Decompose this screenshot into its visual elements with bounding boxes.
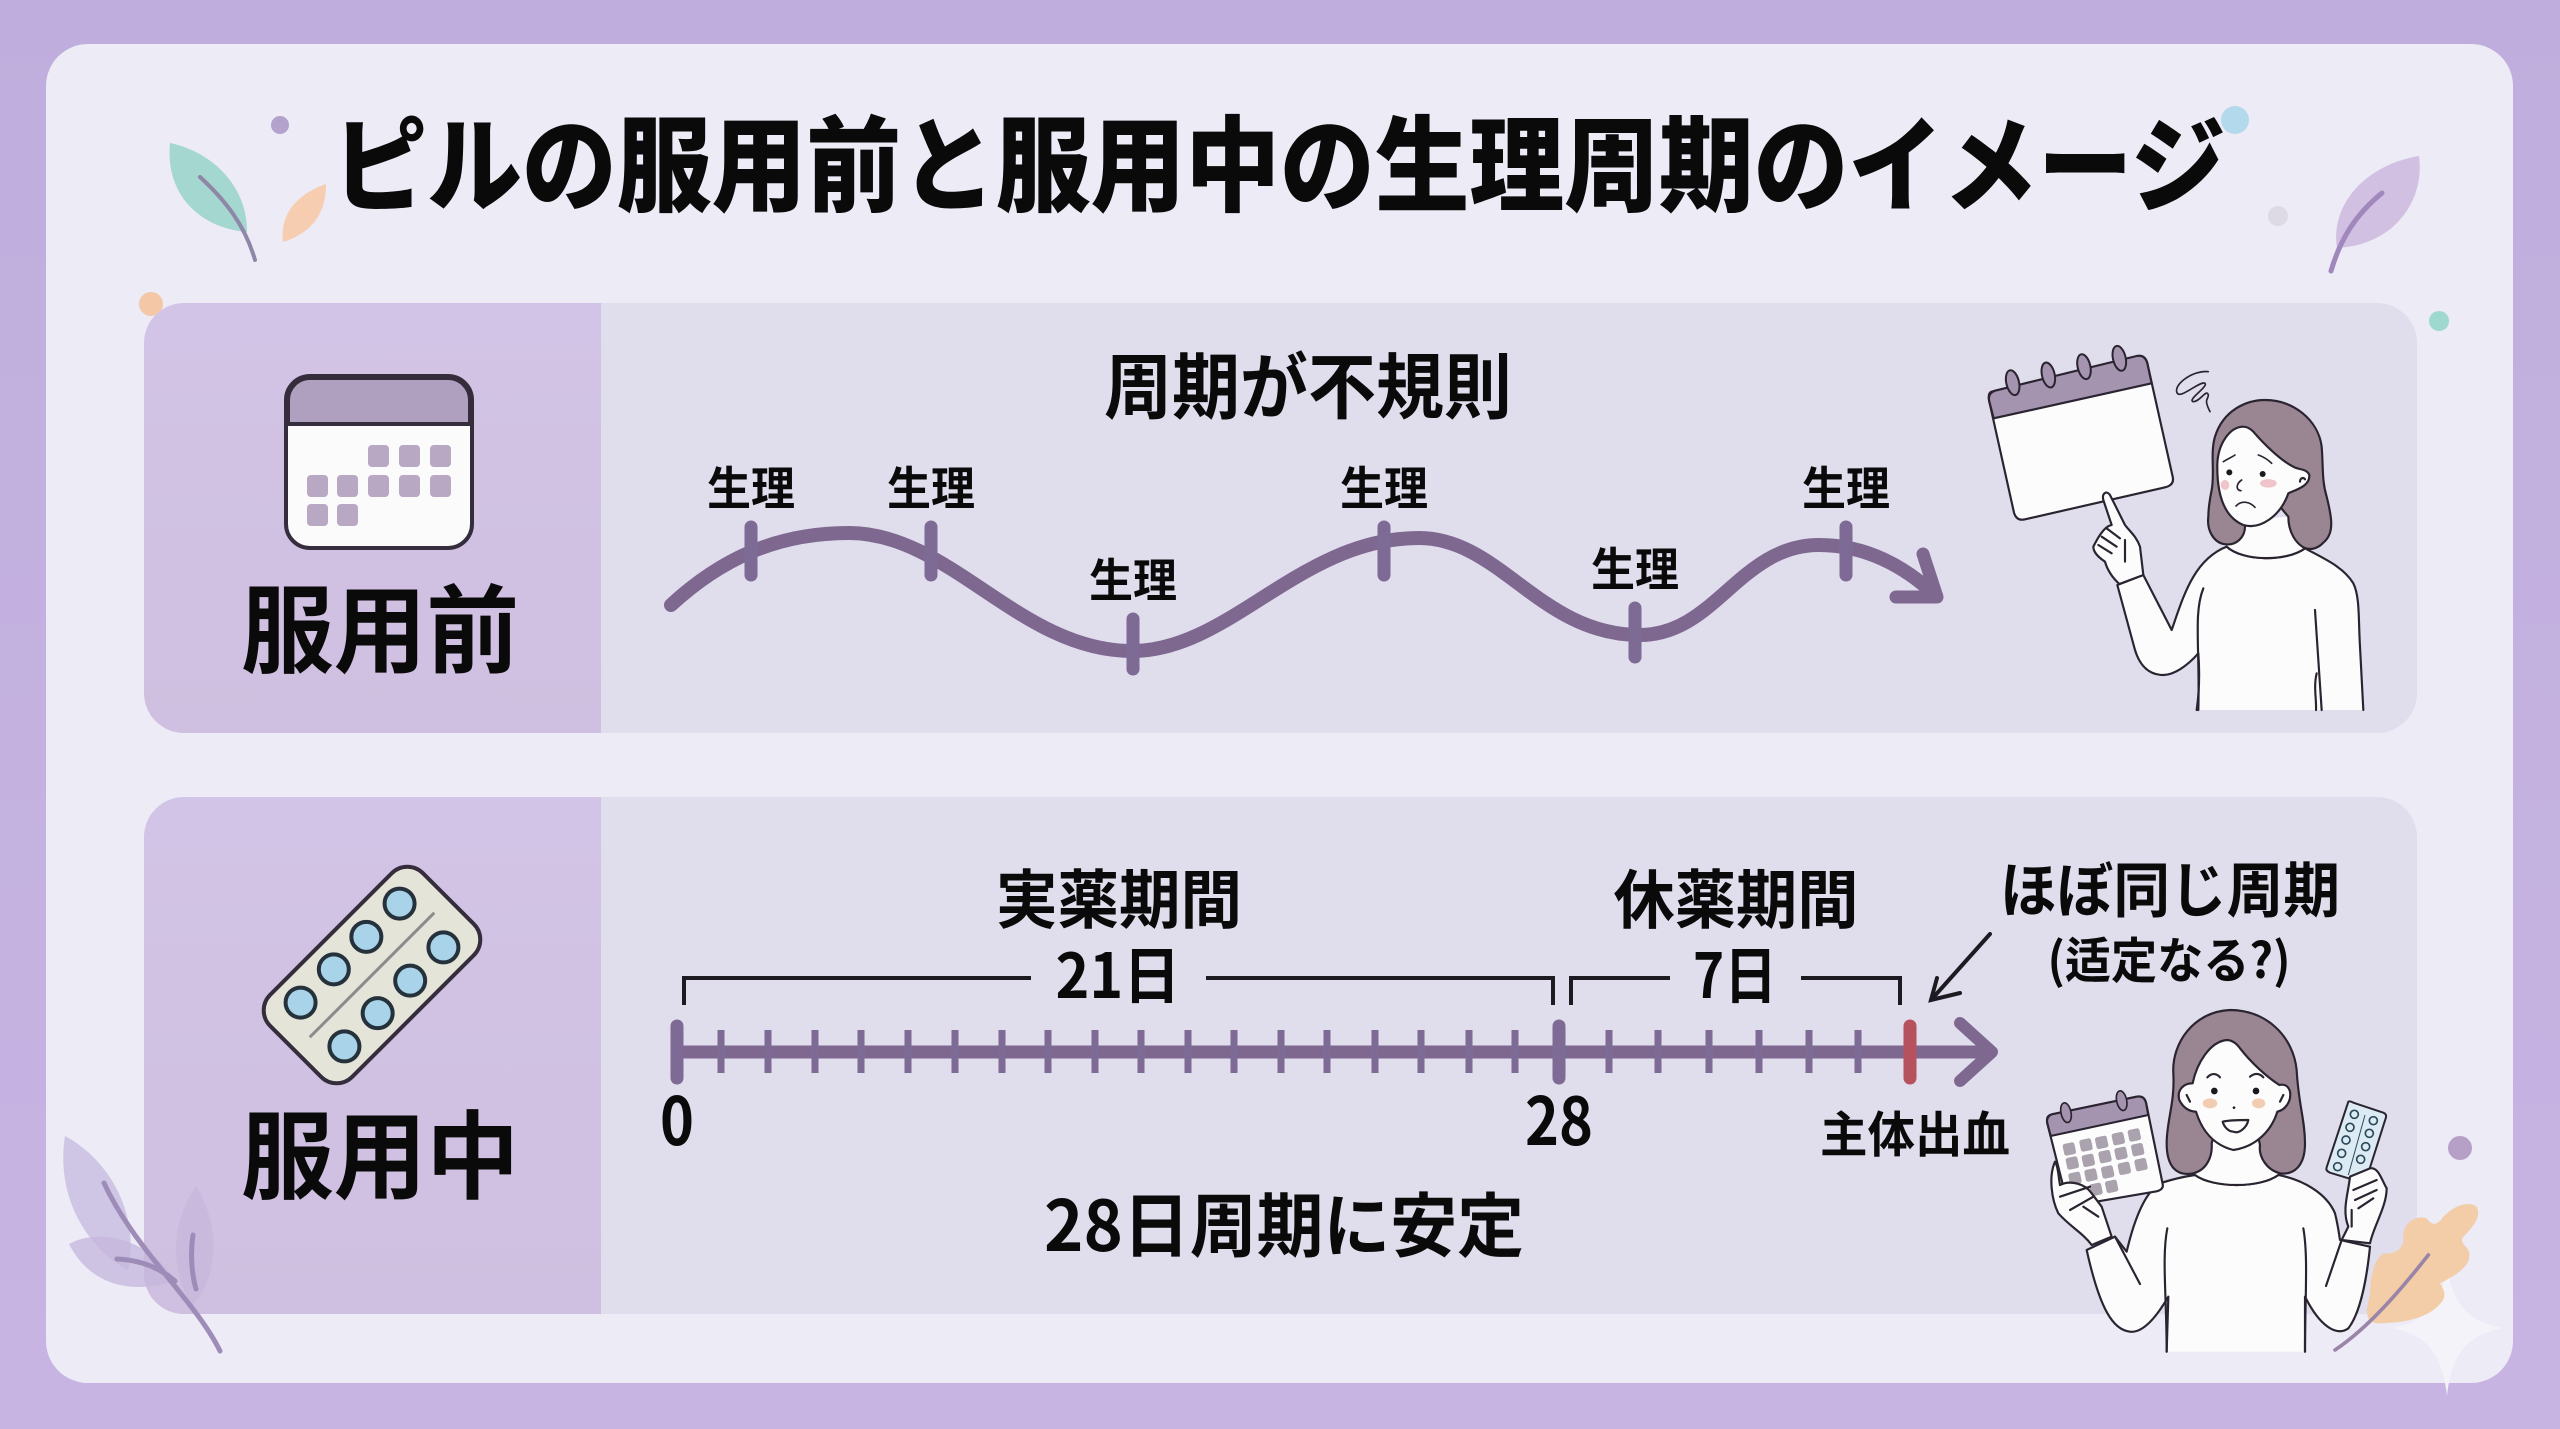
label: withdrawal bleeding: 主体出血: [1820, 1096, 2010, 1167]
chart: 28-day timeline: [677, 1023, 1992, 1081]
callout: nearly same cycle: ほぼ同じ周期: [2000, 843, 2340, 930]
decoration: bottom-left leaves: [63, 1136, 220, 1351]
decoration: bottom-right dot: [2448, 1136, 2472, 1160]
decoration: top-left leaves and dots: [139, 116, 326, 316]
illustration: happy woman with calendar and pills: [2047, 1010, 2478, 1352]
heading: before: 服用前: [241, 554, 519, 693]
label: pill-free period: 休薬期間: [1614, 850, 1858, 942]
panel: before label area: [144, 303, 601, 733]
label: day 0: 0: [660, 1069, 694, 1165]
panel: during content area: [601, 797, 2417, 1314]
decoration: top-right leaf and dots: [2221, 106, 2449, 331]
icon: calendar: [286, 376, 472, 548]
decoration: sparkle: [2392, 1265, 2502, 1396]
panel: before taking the pill: [144, 303, 2417, 733]
panel: before content area: [601, 303, 2417, 733]
label: period 4: 生理: [1340, 453, 1428, 519]
label: active pill period: 実薬期間: [996, 850, 1242, 942]
bracket: 7 days: [1571, 978, 1900, 1005]
icon: blister pack: [255, 858, 489, 1092]
small calendar: [2047, 1090, 2163, 1205]
heading: during: 服用中: [241, 1080, 519, 1219]
illustration: worried woman with blank calendar: [1989, 345, 2363, 710]
label: period 6: 生理: [1802, 453, 1890, 519]
label: 21 days: 21日: [1056, 926, 1180, 1016]
title: ピルの服用前と服用中の生理周期のイメージ: [332, 82, 2226, 233]
label: period 5: 生理: [1591, 534, 1679, 600]
arrow: callout pointer: [1931, 934, 1990, 1000]
small blister pack: [2326, 1101, 2386, 1183]
bracket: 21 days: [684, 978, 1553, 1005]
chart: irregular wave: [671, 527, 1937, 669]
panel: during label area: [144, 797, 601, 1314]
text: stable 28-day cycle: 28日周期に安定: [1044, 1171, 1524, 1272]
label: period 3: 生理: [1089, 545, 1177, 611]
panel: during pill use: [144, 797, 2417, 1314]
label: period 2: 生理: [887, 453, 975, 519]
decoration: orange leaf: [2367, 1204, 2478, 1323]
label: period 1: 生理: [707, 453, 795, 519]
heading: irregular cycle: 周期が不規則: [1104, 329, 1512, 434]
callout: subtext: (适定なる?): [2048, 922, 2290, 993]
label: 7 days: 7日: [1693, 926, 1777, 1016]
label: day 28: 28: [1525, 1069, 1593, 1165]
